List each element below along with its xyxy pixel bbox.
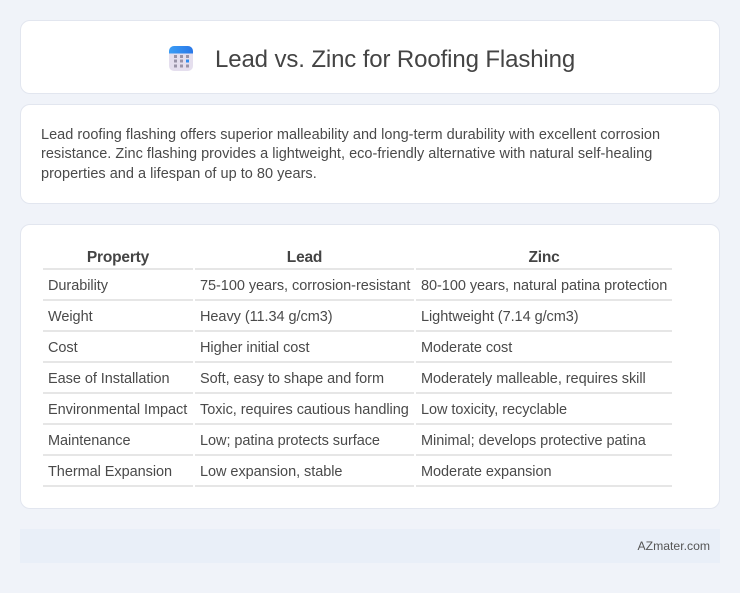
panel: comparison table xyxy=(20,224,720,509)
footer bar xyxy=(20,529,720,563)
text: Moderately malleable, requires skill xyxy=(421,371,646,387)
panel: summary xyxy=(20,104,720,204)
row: Cost: Cost xyxy=(48,340,78,356)
summary text: properties and a lifespan of up to 80 years. xyxy=(41,166,317,182)
text: Low toxicity, recyclable xyxy=(421,402,567,418)
text: Higher initial cost xyxy=(200,340,309,356)
footer credit: AZmater.com xyxy=(638,539,710,553)
header: Zinc: Zinc xyxy=(528,249,560,266)
text: Low expansion, stable xyxy=(200,464,342,480)
title: Lead vs. Zinc for Roofing Flashing xyxy=(215,46,575,73)
header: Lead: Lead xyxy=(287,249,322,266)
row: Maintenance: Maintenance xyxy=(48,433,130,449)
row: Weight: Weight xyxy=(48,309,93,325)
row: Ease of Installation: Ease of Installation xyxy=(48,371,170,387)
text: 75-100 years, corrosion-resistant xyxy=(200,278,410,294)
summary text: resistance. Zinc flashing provides a lightweight, eco-friendly alternative with natural self-healing xyxy=(41,146,652,162)
summary text xyxy=(41,126,660,182)
text: Soft, easy to shape and form xyxy=(200,371,384,387)
text: Toxic, requires cautious handling xyxy=(200,402,409,418)
summary text: Lead roofing flashing offers superior malleability and long-term durability with excellent corrosion xyxy=(41,126,660,142)
icon: calendar xyxy=(169,46,193,71)
row: Thermal Expansion: Thermal Expansion xyxy=(48,464,172,480)
text: Low; patina protects surface xyxy=(200,433,380,449)
text: Heavy (11.34 g/cm3) xyxy=(200,309,333,325)
row: Environmental Impact: Environmental Impact xyxy=(48,402,187,418)
header: Property: Property xyxy=(87,249,149,266)
panel: header xyxy=(20,20,720,94)
text: Moderate cost xyxy=(421,340,512,356)
text: 80-100 years, natural patina protection xyxy=(421,278,667,294)
text: Minimal; develops protective patina xyxy=(421,433,646,449)
text: Moderate expansion xyxy=(421,464,552,480)
text: Lightweight (7.14 g/cm3) xyxy=(421,309,579,325)
row: Durability: Durability xyxy=(48,278,108,294)
